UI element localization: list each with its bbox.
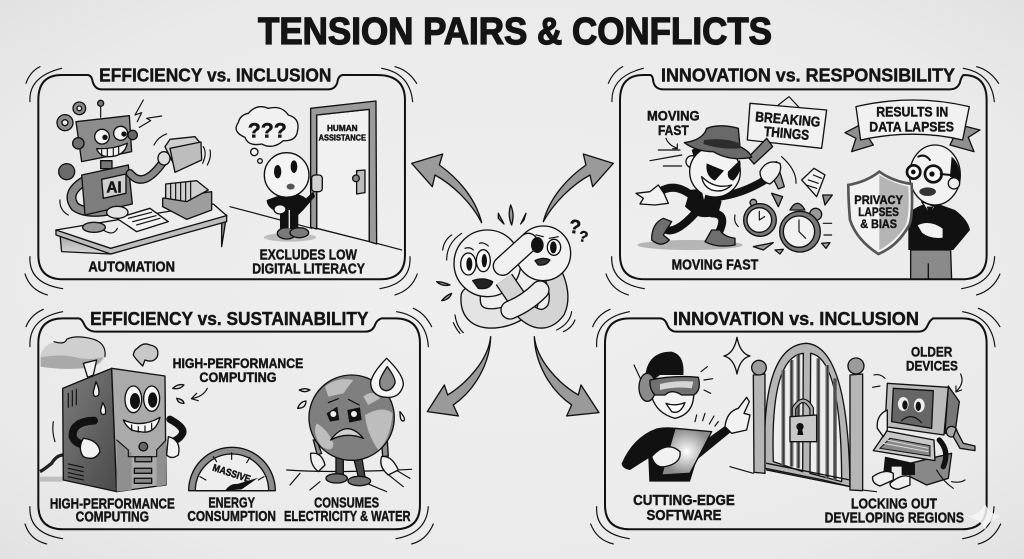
label: electricity and water: ELECTRICITY & WATER [284, 509, 411, 525]
label: older: OLDER [911, 344, 952, 360]
arrow: to bottom left [427, 337, 491, 416]
label: energy: ENERGY [208, 495, 255, 511]
character: VR user [622, 352, 750, 482]
sign: breaking things [747, 97, 827, 148]
label: moving fast bottom: MOVING FAST [672, 257, 758, 273]
heading: INNOVATION vs. INCLUSION [673, 308, 919, 329]
arrow: to top left [412, 154, 482, 223]
arrow: to bottom right [534, 337, 599, 416]
small arrow [666, 138, 677, 149]
panel frame [606, 67, 1000, 295]
icon: door: HUMAN [327, 124, 358, 133]
label: high-performance computing: HIGH-PERFORMANCE [50, 496, 175, 512]
icon: file box [163, 181, 212, 219]
banner: results in data lapses: RESULTS IN [876, 104, 948, 120]
label: moving fast top: MOVING [647, 108, 700, 124]
icon: computer tower [40, 368, 184, 492]
label: computing top: COMPUTING [199, 369, 277, 385]
icon: shield: LAPSES [858, 205, 899, 219]
center: tangled knot [412, 154, 613, 416]
label: high-performance computing top: HIGH-PERFORMANCE [173, 355, 303, 371]
character: running man [636, 126, 784, 250]
motion lines [443, 233, 575, 333]
label: consumption: CONSUMPTION [187, 509, 276, 525]
icon: shield: PRIVACY [854, 193, 904, 207]
label: software: SOFTWARE [646, 508, 722, 524]
sign: breaking things: BREAKING [755, 108, 821, 130]
panel frame [25, 67, 417, 295]
stress marks [437, 205, 526, 301]
panel: innovation vs. inclusion [591, 308, 1002, 544]
banner: results in data lapses [845, 100, 980, 152]
label: consumes: CONSUMES [314, 495, 379, 511]
title: TENSION PAIRS & CONFLICTS [258, 11, 772, 53]
watermark sparkle [968, 503, 1002, 530]
icon: shield [848, 172, 912, 254]
knot body [454, 226, 571, 319]
icon: robot: AI [106, 180, 122, 197]
heading: INNOVATION vs. RESPONSIBILITY [661, 65, 955, 86]
icon: door [311, 101, 377, 244]
arrow: to top right [543, 154, 613, 222]
icon: thought bubble: ??? [248, 118, 287, 142]
label: computing: COMPUTING [76, 510, 149, 526]
label: cutting-edge: CUTTING-EDGE [633, 493, 735, 509]
character: old computer [873, 375, 975, 489]
label: locking out: LOCKING OUT [851, 496, 937, 512]
icon: smoke clouds [41, 337, 158, 377]
small arrow [191, 388, 207, 401]
illustration: desk [56, 204, 227, 254]
icon: door: ASSISTANCE [319, 133, 367, 142]
icon: broken clocks [735, 157, 832, 254]
icon: robot [57, 100, 210, 218]
chart: massive gauge [189, 447, 275, 491]
panel frame [25, 308, 433, 544]
label: devices: DEVICES [906, 358, 958, 374]
icon: locked gate [730, 343, 877, 492]
icon: shield: & BIAS [860, 217, 897, 231]
face: right [531, 235, 561, 265]
face: left [461, 243, 493, 289]
banner: results in data lapses: DATA LAPSES [869, 118, 954, 134]
panel frame [591, 308, 1001, 544]
label: automation: AUTOMATION [88, 260, 175, 276]
icon: thought bubble [236, 107, 298, 163]
panel: innovation vs. responsibility [606, 65, 1000, 295]
small arrow [956, 374, 962, 392]
sign: breaking things: THINGS [763, 123, 810, 143]
label: digital literacy: DIGITAL LITERACY [252, 262, 365, 278]
floor line [230, 207, 402, 250]
question marks: ? [568, 217, 582, 239]
icon: confused person [264, 153, 322, 242]
chart: massive gauge: MASSIVE [211, 463, 252, 486]
heading: EFFICIENCY vs. SUSTAINABILITY [90, 308, 369, 329]
heading: EFFICIENCY vs. INCLUSION [99, 65, 331, 86]
question mark small: ? [577, 228, 590, 246]
panel: efficiency vs. sustainability [25, 308, 433, 544]
icon: sparkle [724, 337, 750, 374]
icon: sad earth [287, 358, 412, 492]
label: excludes low digital literacy: EXCLUDES LOW [260, 247, 357, 263]
panel: efficiency vs. inclusion [25, 65, 417, 295]
character: worried man [907, 145, 970, 279]
label: fast: FAST [658, 122, 689, 138]
label: developing regions: DEVELOPING REGIONS [825, 510, 964, 526]
